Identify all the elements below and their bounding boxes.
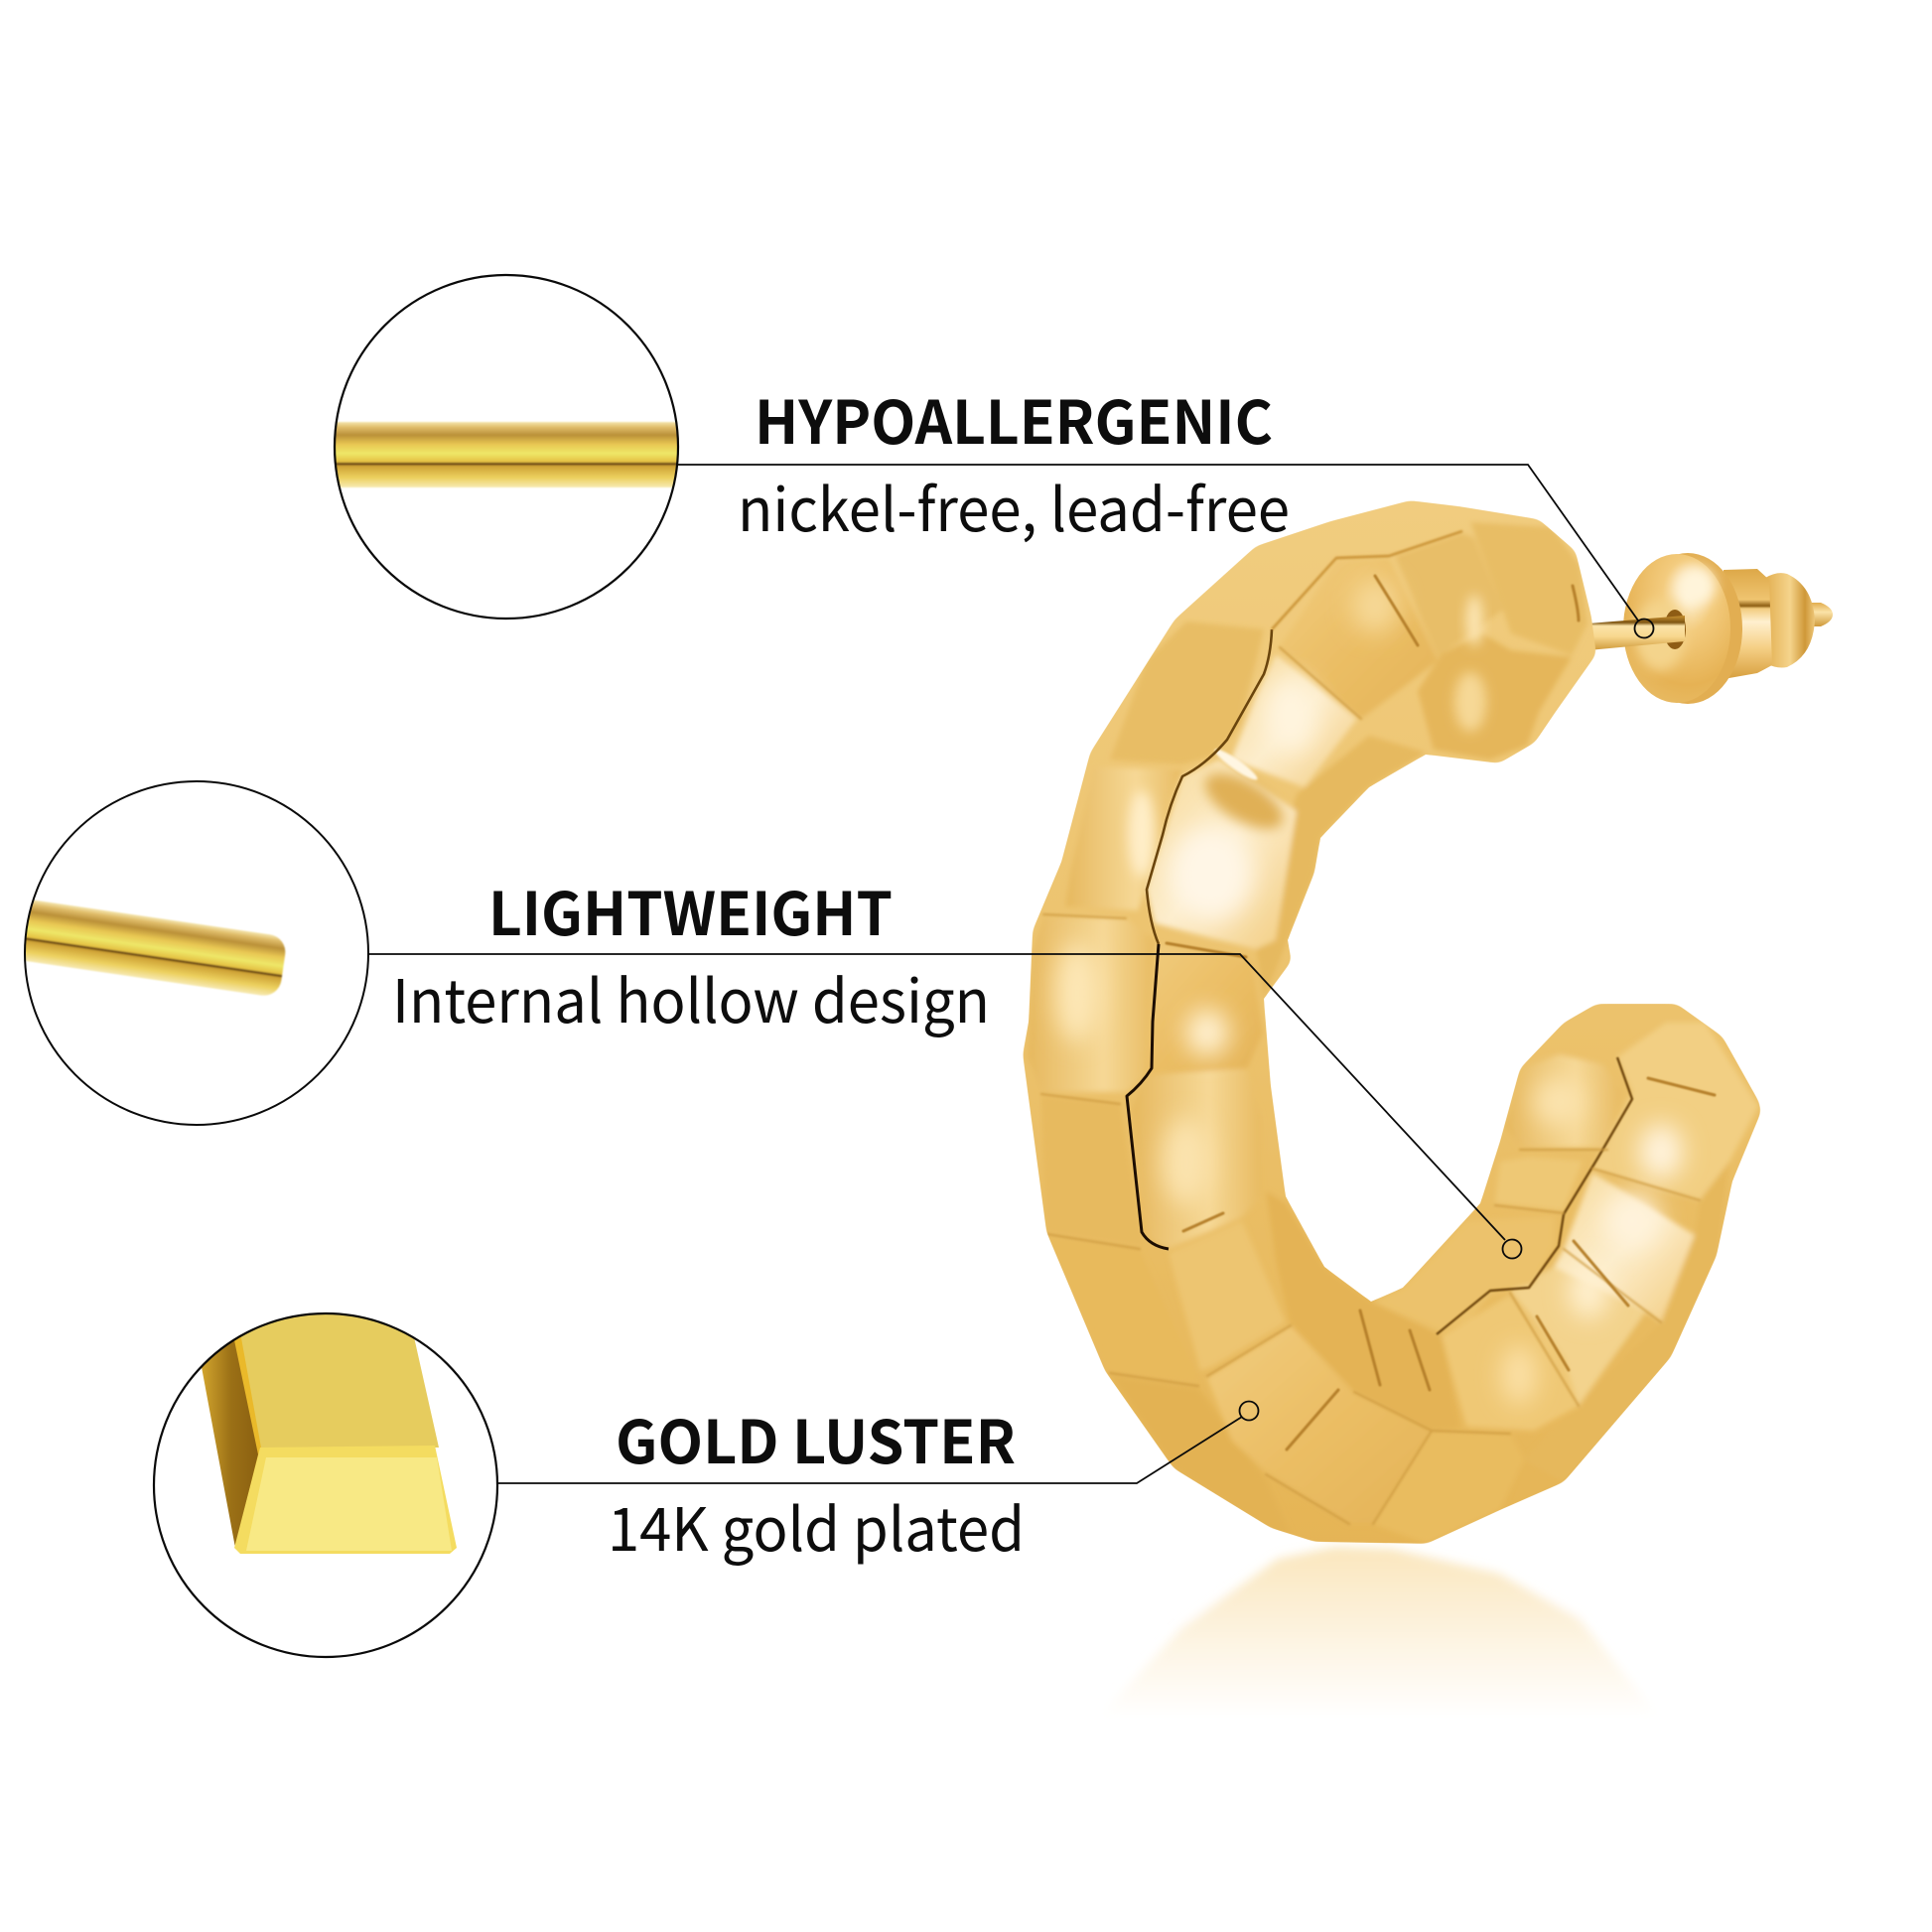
- stud post: [1588, 616, 1685, 650]
- post tip: [1802, 603, 1833, 626]
- nut cup rim: [1633, 553, 1742, 704]
- rib tile 3 bright: [1554, 1173, 1695, 1322]
- tile f1 front top: [1280, 558, 1438, 719]
- groove marks: [1167, 576, 1715, 1449]
- outer ring of nut: [1765, 573, 1815, 667]
- tile 4 outer lower: [1041, 1096, 1144, 1246]
- tile f1b front top right: [1395, 533, 1503, 657]
- nut barrel: [1724, 569, 1772, 679]
- rib tile 2: [1510, 1267, 1646, 1406]
- heading: hypoallergenic: HYPOALLERGENIC: [755, 375, 1273, 462]
- front right tile r3: [1373, 1217, 1554, 1332]
- nut cup: [1623, 554, 1730, 703]
- circle outline: [335, 275, 678, 619]
- text: 14K gold plated: 14K gold plated: [608, 1482, 1025, 1569]
- earring body: [1013, 486, 1787, 1559]
- soft shaded tiles: [1028, 522, 1758, 1544]
- earring back and post: [1588, 553, 1833, 704]
- panel: hypoallergenic detail circle: [328, 275, 685, 619]
- circle outline: [154, 1313, 497, 1657]
- cup highlight: [1676, 566, 1716, 606]
- circle outline: [25, 781, 368, 1125]
- cup dimple: [1634, 600, 1686, 671]
- rib tile 1: [1442, 1295, 1579, 1431]
- nut hole: [1664, 610, 1686, 649]
- tile f6: [1169, 1221, 1286, 1371]
- top right cap: [1592, 1023, 1758, 1200]
- tile f3 bright large: [1147, 759, 1297, 949]
- inner bottom wall: [1267, 1195, 1451, 1393]
- right outer rim: [1566, 1172, 1726, 1479]
- top crease: [1272, 531, 1462, 629]
- panel: gold luster detail circle: [154, 1311, 497, 1657]
- front right tile r2: [1495, 1157, 1583, 1211]
- callout line: hypoallergenic: [678, 465, 1654, 637]
- hoop base: [1013, 486, 1787, 1559]
- end tile: [1470, 522, 1587, 655]
- right crease: [1437, 1057, 1632, 1334]
- brightest highlight: [1170, 826, 1253, 921]
- text: nickel-free, lead-free: nickel-free, lead-free: [738, 463, 1290, 549]
- dent in bright tile: [1196, 762, 1292, 840]
- heading: gold luster: GOLD LUSTER: [616, 1395, 1016, 1481]
- dark crease middle: [1127, 944, 1169, 1249]
- blurred highlights and dents: [1055, 578, 1683, 1405]
- tile f7: [1207, 1326, 1388, 1517]
- tile f5 front: [1132, 1068, 1261, 1249]
- tile seams: [1041, 647, 1700, 1524]
- gold bar close-up: [202, 1311, 457, 1554]
- tile 1 upper left: [1110, 621, 1264, 764]
- earring reflection: [1098, 1547, 1660, 1718]
- front right tile r1: [1505, 1054, 1622, 1148]
- tapered post close-up: [0, 896, 288, 998]
- panel: lightweight detail circle: [0, 781, 368, 1125]
- tile 6 outer bottom: [1110, 1375, 1291, 1534]
- tile 5 outer lower: [1046, 1236, 1198, 1381]
- tile f4: [1158, 944, 1263, 1070]
- tile 2 outer left: [1065, 766, 1182, 910]
- inner wall upper: [1256, 736, 1426, 999]
- callout line: lightweight: [368, 954, 1521, 1259]
- upper end lobe: [1418, 633, 1572, 759]
- heading: lightweight: LIGHTWEIGHT: [488, 867, 893, 953]
- tile 3 outer left: [1028, 916, 1155, 1092]
- dark crease upper: [1147, 629, 1272, 944]
- tile f2 bright: [1231, 654, 1357, 787]
- text: internal hollow design: Internal hollow design: [392, 954, 990, 1040]
- gold wire close-up: [328, 422, 685, 487]
- bottom right tile: [1378, 1448, 1521, 1544]
- callout line: gold luster: [497, 1402, 1259, 1483]
